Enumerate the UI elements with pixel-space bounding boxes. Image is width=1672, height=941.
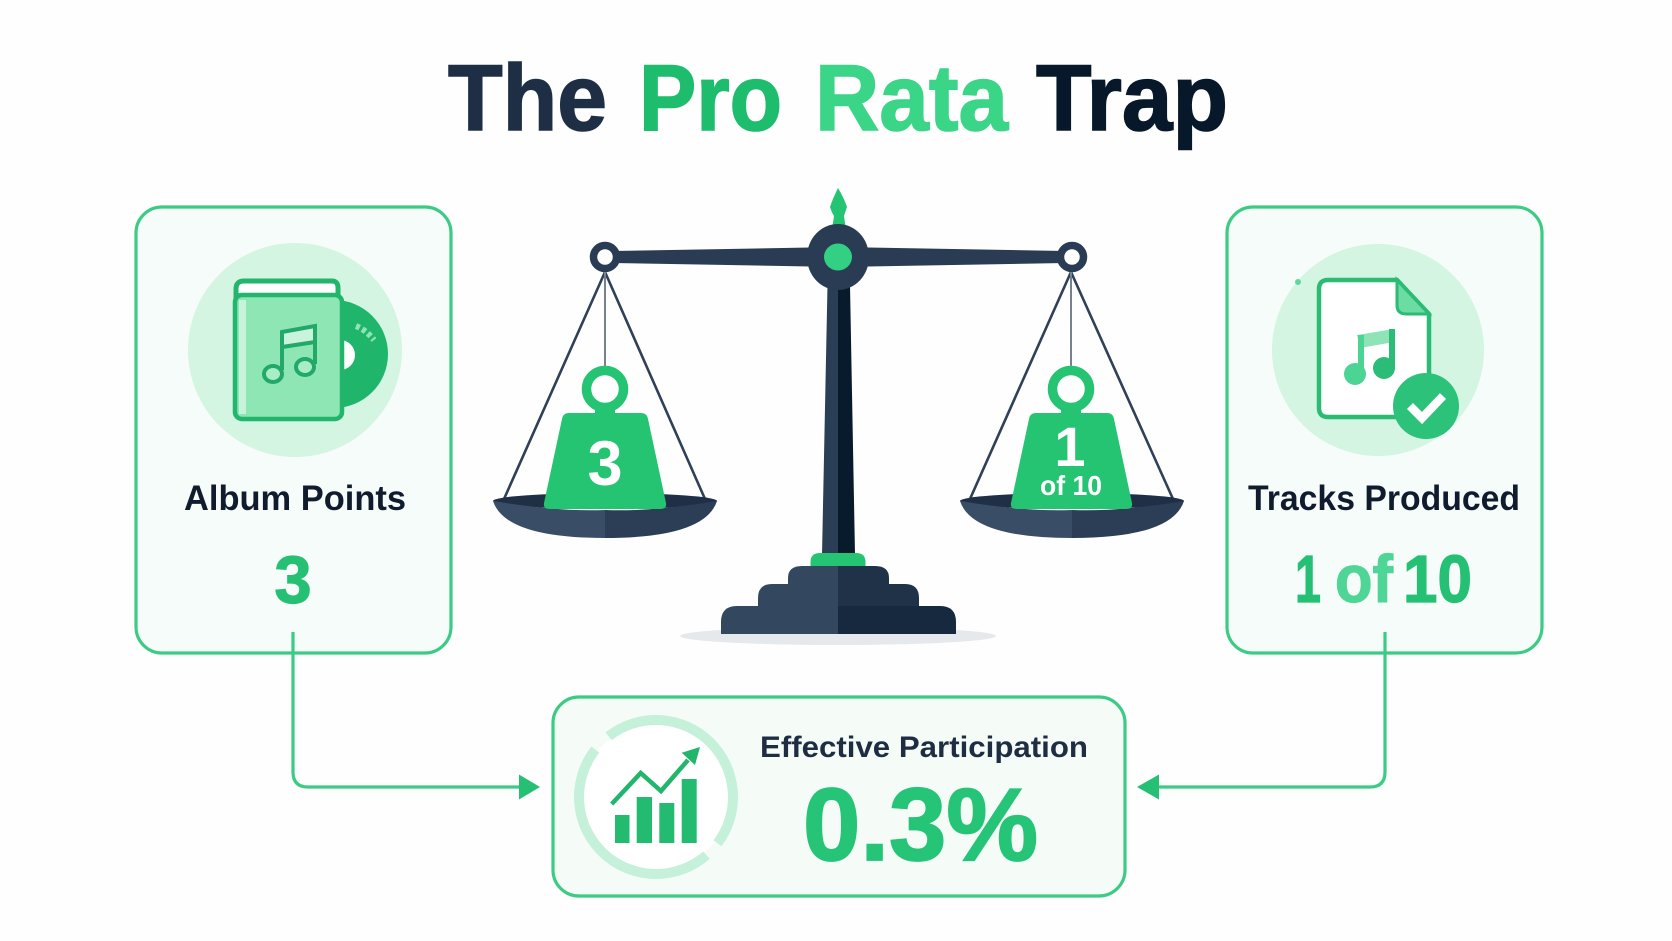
left pan strings (504, 272, 705, 499)
title: The (448, 45, 607, 150)
panel: tracks produced (1227, 207, 1542, 653)
value: 1 of 10 (1295, 542, 1472, 617)
value: 3: 3 (274, 543, 312, 618)
label: album points: Album Points (184, 479, 406, 518)
icon: growth chart in ring (579, 720, 733, 874)
icon: music note (264, 326, 315, 382)
value: 0.3%: 0.3% (803, 767, 1038, 882)
right pan (960, 493, 1184, 538)
title: Trap (1036, 45, 1228, 150)
value: 1 of 10: 10 (1403, 542, 1472, 617)
icon: music note (1344, 329, 1395, 385)
title: Rata (815, 45, 1009, 150)
title (448, 45, 1228, 150)
right beam ring (1060, 246, 1084, 268)
beam (612, 247, 1065, 267)
stand base (721, 553, 956, 634)
hub (807, 224, 869, 290)
scale shadow (680, 627, 996, 645)
title: Pro (639, 45, 782, 150)
arrow: album points to participation (293, 632, 540, 800)
left pan (493, 493, 717, 538)
value: 1 of 10: of (1335, 542, 1394, 617)
label: effective participation: Effective Participation (760, 731, 1088, 764)
left weight: 3: 3 (587, 429, 623, 499)
left weight: 3 (544, 370, 666, 509)
post (822, 285, 855, 555)
icon: audio file with check (1272, 244, 1484, 456)
finial (830, 188, 847, 226)
right pan strings (970, 272, 1173, 499)
right weight: 1 of 10 (1011, 370, 1132, 509)
panel: album points (136, 207, 451, 653)
right weight: 1 of 10: 1 (1054, 415, 1086, 478)
arrow: tracks produced to participation (1137, 632, 1385, 800)
panel: effective participation (553, 697, 1125, 896)
right weight: 1 of 10: of 10 (1040, 470, 1102, 501)
label: tracks produced: Tracks Produced (1248, 479, 1520, 518)
value: 1 of 10: 1 (1295, 542, 1321, 617)
left beam ring (594, 246, 616, 268)
balance scale (493, 188, 1184, 645)
icon: album with disc (188, 243, 402, 457)
